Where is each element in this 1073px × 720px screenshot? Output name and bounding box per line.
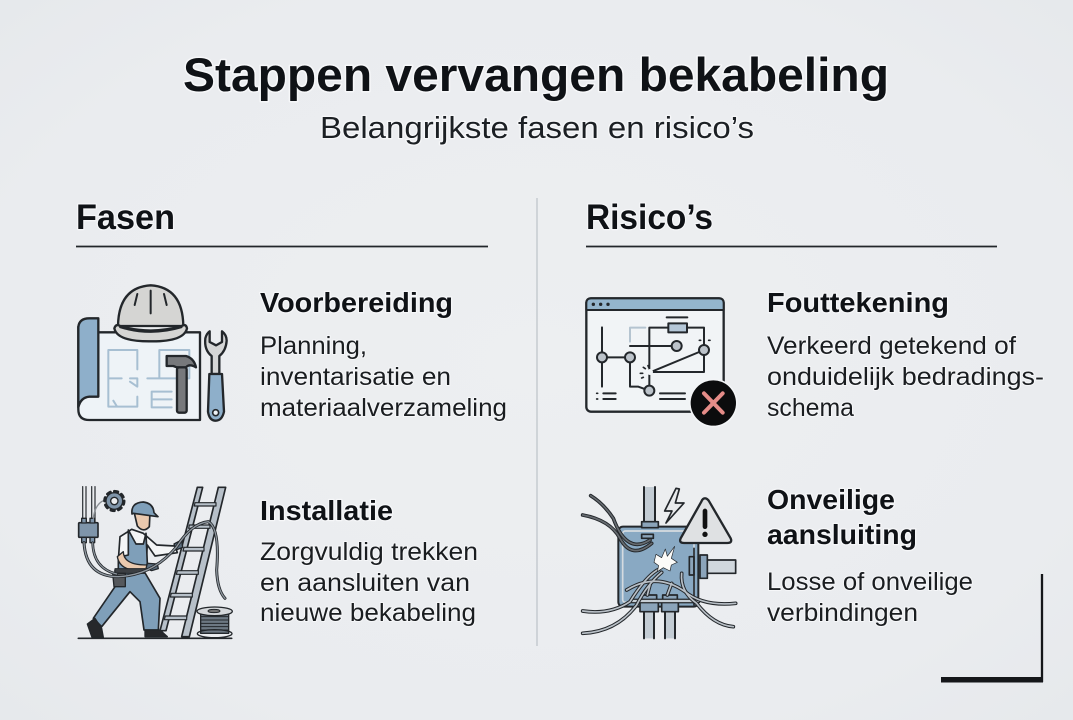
- text: Voorbereiding: Planning,: [260, 332, 367, 360]
- spool: [197, 607, 232, 638]
- heading: Fasen: Fasen: [76, 198, 175, 237]
- text: Onveilige aansluiting: Onveilige: [767, 484, 895, 515]
- text: Installatie: en aansluiten van: [260, 569, 470, 597]
- text: Installatie: [260, 495, 478, 627]
- text: Fouttekening: onduidelijk bedradings-: [767, 363, 1044, 391]
- text: Onveilige aansluiting: Losse of onveilige: [767, 568, 973, 596]
- text: Fouttekening: Fouttekening: [767, 287, 949, 318]
- ladder: [160, 487, 226, 637]
- center divider: [536, 198, 538, 646]
- text: Fouttekening: schema: [767, 394, 854, 422]
- icon: faulty wiring diagram: [586, 298, 738, 427]
- text: Fouttekening: [767, 287, 1044, 422]
- text: Onveilige aansluiting: aansluiting: [767, 519, 917, 550]
- cable: [84, 522, 225, 598]
- icon: blueprint, helmet and tools: [78, 285, 227, 421]
- text: Voorbereiding: Voorbereiding: [260, 287, 453, 318]
- panel: risico's: [583, 198, 1044, 638]
- text: Installatie: nieuwe bekabeling: [260, 599, 476, 627]
- icon: unsafe junction box: [583, 487, 736, 638]
- heading: Risico's: Risico’s: [586, 198, 713, 237]
- text: Fouttekening: Verkeerd getekend of: [767, 332, 1016, 360]
- text: Installatie: Installatie: [260, 495, 393, 526]
- text: Onveilige aansluiting: verbindingen: [767, 599, 918, 627]
- text: Voorbereiding: materiaalverzameling: [260, 394, 507, 422]
- tool belt: [115, 569, 145, 573]
- title: Stappen vervangen bekabeling: [183, 48, 889, 101]
- text: Onveilige aansluiting: [767, 484, 973, 627]
- panel: fasen: [76, 198, 507, 638]
- corner bracket: [941, 574, 1043, 682]
- text: Voorbereiding: [260, 287, 507, 422]
- icon: installer on ladder: [78, 487, 232, 638]
- text: Voorbereiding: inventarisatie en: [260, 363, 451, 391]
- leg and body: [93, 570, 160, 630]
- subtitle: Belangrijkste fasen en risico’s: [320, 110, 754, 145]
- text: Installatie: Zorgvuldig trekken: [260, 538, 478, 566]
